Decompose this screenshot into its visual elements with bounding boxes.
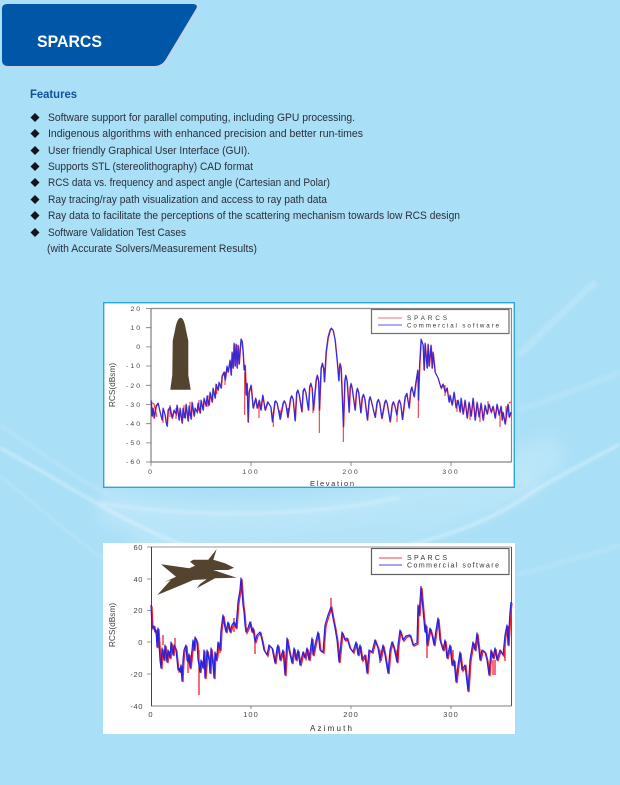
x axis labels [148, 710, 459, 719]
y axis labels: 60 [133, 543, 143, 552]
x axis labels: 0 [148, 710, 154, 719]
feature list: User friendly Graphical User Interface (GUI). [48, 145, 250, 157]
y axis labels: 0 [136, 344, 142, 351]
series: Commercial software [151, 578, 511, 691]
y axis title: RCS(dBsm) [107, 603, 117, 647]
feature list: Software Validation Test Cases [48, 227, 187, 239]
y axis labels [126, 306, 142, 466]
icon: missile silhouette [170, 318, 191, 390]
y axis labels: 10 [130, 325, 142, 332]
x axis title: Elevation [310, 479, 354, 488]
y axis labels: -40 [130, 702, 143, 711]
x axis labels: 0 [148, 469, 154, 476]
x axis labels: 200 [343, 710, 359, 719]
y axis labels: -60 [126, 459, 142, 466]
chart: RCS vs Elevation [104, 303, 514, 488]
title: SPARCS [37, 32, 102, 51]
y axis labels: -40 [126, 421, 142, 428]
y axis labels: -20 [126, 383, 142, 390]
y axis labels: -10 [126, 363, 142, 370]
y axis title: RCS(dBsm) [107, 363, 117, 407]
legend: SPARCS [407, 315, 447, 322]
feature list: Ray tracing/ray path visualization and access to ray path data [48, 194, 327, 206]
y axis labels: -20 [130, 670, 143, 679]
x axis labels [148, 469, 460, 476]
y axis labels: -30 [126, 402, 142, 409]
chart: RCS vs Azimuth [103, 543, 515, 734]
x axis labels: 100 [243, 710, 259, 719]
feature list: Indigenous algorithms with enhanced precision and better run-times [48, 128, 364, 140]
y axis labels: 20 [130, 306, 142, 313]
x axis title: Azimuth [310, 724, 352, 733]
feature list [30, 112, 460, 255]
y axis labels: 40 [133, 575, 143, 584]
legend: Commercial software [407, 562, 499, 570]
y axis labels: -50 [126, 440, 142, 447]
header banner [2, 3, 199, 68]
y axis labels: 20 [133, 606, 143, 615]
y axis labels [130, 543, 143, 711]
x axis labels: 300 [442, 469, 460, 476]
x axis labels: 200 [342, 469, 360, 476]
series: SPARCS [152, 579, 512, 695]
heading: Features: Features [30, 89, 77, 101]
feature list: Software support for parallel computing, including GPU processing. [48, 112, 355, 124]
legend [372, 548, 509, 574]
series: SPARCS [151, 329, 512, 442]
legend: Commercial software [407, 322, 500, 330]
feature list: RCS data vs. frequency and aspect angle (Cartesian and Polar) [48, 177, 330, 189]
feature list: Ray data to facilitate the perceptions of the scattering mechanism towards low RCS design [48, 210, 460, 222]
y axis labels: 0 [138, 638, 143, 647]
legend [372, 310, 509, 334]
x axis labels: 100 [242, 469, 260, 476]
series: Commercial software [151, 328, 511, 427]
feature list: Supports STL (stereolithography) CAD format [48, 161, 253, 173]
x axis labels: 300 [443, 710, 459, 719]
legend: SPARCS [407, 555, 447, 562]
icon: fighter jet silhouette [157, 549, 237, 595]
feature list: (with Accurate Solvers/Measurement Results) [47, 243, 257, 255]
